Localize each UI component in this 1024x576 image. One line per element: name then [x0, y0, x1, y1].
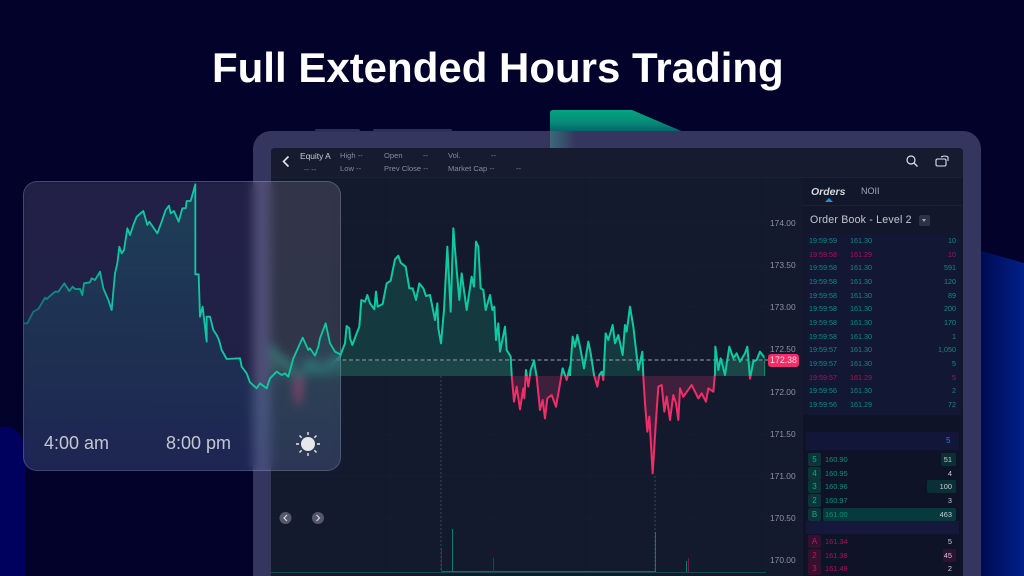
- time and sales rows: 19:59:58: [809, 263, 837, 272]
- ask rows: 5: [948, 537, 952, 546]
- chart grid: [271, 178, 766, 572]
- header quote fields: Prev Close --: [384, 164, 428, 173]
- axis labels: 171.00: [770, 471, 796, 481]
- icon: search: [906, 155, 918, 167]
- time and sales rows: 19:59:59: [809, 236, 837, 245]
- time and sales rows: 161.29: [850, 250, 872, 258]
- time and sales rows: 161.30: [850, 290, 872, 300]
- axis labels: 172.50: [770, 344, 796, 354]
- glass panel: [23, 181, 341, 471]
- time and sales rows: 89: [948, 290, 956, 300]
- header quote fields: --: [516, 164, 521, 173]
- ask rows: 3: [812, 564, 817, 573]
- axis labels: 173.50: [770, 260, 796, 270]
- header strip: [271, 148, 963, 178]
- header quote fields: Market Cap --: [448, 164, 494, 173]
- time and sales rows: 10: [948, 250, 956, 258]
- ask rows: [808, 535, 956, 575]
- device bezel: [253, 131, 981, 576]
- book summary band: 5: [946, 436, 950, 445]
- axis labels: 170.00: [770, 555, 796, 565]
- panel: orders tabs: NOII: [861, 186, 880, 196]
- panel: time and sales list: [806, 234, 959, 415]
- time and sales rows: 72: [948, 400, 956, 409]
- ask rows: 2: [948, 564, 952, 573]
- header quote fields: Vol.: [448, 151, 461, 160]
- time and sales rows: 161.30: [850, 332, 872, 340]
- axis labels: 174.00: [770, 218, 796, 228]
- end time label: 8:00 pm: [166, 433, 231, 453]
- time and sales rows: 161.30: [850, 359, 872, 368]
- time and sales rows: 591: [944, 263, 956, 272]
- last price dashed line: [271, 359, 768, 361]
- axis labels: [770, 218, 796, 565]
- chart area fill: [23, 184, 342, 471]
- time and sales rows: 19:59:58: [809, 304, 837, 313]
- icon: rotate screen: [935, 156, 949, 166]
- ask rows: 2: [812, 550, 817, 560]
- panel: orders tabs: Orders: [811, 186, 845, 198]
- last price tag: 172.38: [770, 355, 797, 365]
- device top button: [373, 129, 452, 132]
- time and sales rows: 1,050: [938, 345, 956, 354]
- bid rows: 4: [948, 469, 952, 478]
- volume bars: [271, 529, 766, 572]
- time and sales rows: 19:59:57: [809, 372, 837, 382]
- time and sales rows: 5: [952, 359, 956, 368]
- bid rows: 2: [812, 496, 817, 505]
- order book heading: Order Book - Level 2: [810, 214, 912, 226]
- time and sales rows: 161.30: [850, 304, 872, 313]
- axis labels: 173.00: [770, 302, 796, 312]
- panel: orders tabs: [803, 178, 963, 206]
- axis labels: 171.50: [770, 429, 796, 439]
- icon: sun: [296, 432, 320, 456]
- time and sales rows: 10: [948, 236, 956, 245]
- time and sales rows: 19:59:58: [809, 332, 837, 340]
- time and sales rows: 161.30: [850, 318, 872, 327]
- time and sales rows: 120: [944, 277, 956, 286]
- time and sales rows: 5: [952, 372, 956, 382]
- bid rows: 4: [812, 469, 817, 478]
- screen: [271, 148, 963, 576]
- bid rows: 160.90: [825, 455, 848, 464]
- bid rows: 5: [812, 455, 817, 464]
- time and sales rows: 19:59:58: [809, 250, 837, 258]
- bid rows: 161.00: [825, 510, 848, 519]
- crosshair lines: [441, 376, 655, 572]
- header quote fields: --: [423, 151, 428, 160]
- time and sales rows: 161.30: [850, 263, 872, 272]
- time and sales rows: 19:59:58: [809, 290, 837, 300]
- time and sales rows: 19:59:56: [809, 400, 837, 409]
- header quote fields: High --: [340, 151, 363, 160]
- time and sales rows: 19:59:58: [809, 318, 837, 327]
- header quote fields: --: [491, 151, 496, 160]
- bid rows: 160.97: [825, 496, 848, 505]
- price chart: [266, 227, 768, 573]
- device top buttons: [315, 129, 360, 132]
- panel: level 2 book background: [803, 415, 963, 576]
- bid rows: [808, 453, 956, 521]
- bid rows: B: [812, 510, 817, 519]
- bid rows: 100: [940, 482, 952, 491]
- time and sales rows: 2: [952, 386, 956, 395]
- time and sales rows: 170: [944, 318, 956, 327]
- time and sales rows: 19:59:58: [809, 277, 837, 286]
- chart line: [23, 184, 342, 388]
- side panel background: [803, 178, 963, 576]
- title: Full Extended Hours Trading: [212, 44, 784, 91]
- header quote fields: Equity A: [300, 151, 331, 161]
- time and sales rows: 200: [944, 304, 956, 313]
- ask rows: 161.49: [825, 564, 848, 573]
- bid rows: 160.95: [825, 469, 848, 478]
- time and sales rows: 161.30: [850, 345, 872, 354]
- glass panel chart: [24, 183, 342, 471]
- time and sales rows: 19:59:57: [809, 359, 837, 368]
- header quote fields: Open: [384, 151, 403, 160]
- header quote fields: [300, 151, 521, 174]
- chart navigation arrows: [280, 512, 324, 524]
- time and sales rows: 161.29: [850, 400, 872, 409]
- time and sales rows: [809, 236, 956, 415]
- spread band: [806, 521, 959, 534]
- ask rows: 161.34: [825, 537, 848, 546]
- bid rows: 160.96: [825, 482, 848, 491]
- header quote fields: Low --: [340, 164, 361, 173]
- start time label: 4:00 am: [44, 433, 109, 453]
- time and sales rows: 161.30: [850, 236, 872, 245]
- time and sales rows: 19:59:57: [809, 345, 837, 354]
- price line: [271, 228, 765, 473]
- bid rows: 463: [940, 510, 952, 519]
- bid rows: 3: [948, 496, 952, 505]
- lighter band under last price: [341, 361, 765, 376]
- time and sales rows: 161.29: [850, 372, 872, 382]
- bid rows: 51: [944, 455, 952, 464]
- axis labels: 172.00: [770, 387, 796, 397]
- time and sales rows: 1: [952, 332, 956, 340]
- ask rows: 161.38: [825, 550, 848, 560]
- book summary band: [806, 432, 959, 450]
- green tab glow through bezel: [550, 131, 576, 148]
- header quote fields: -- --: [304, 165, 316, 174]
- last price tag: [768, 354, 799, 367]
- time and sales rows: 161.30: [850, 386, 872, 395]
- ask rows: A: [812, 537, 817, 546]
- time and sales rows: 19:59:56: [809, 386, 837, 395]
- time and sales rows: 161.30: [850, 277, 872, 286]
- axis labels: 170.50: [770, 513, 796, 523]
- area fills: [270, 246, 764, 456]
- icon: back chevron: [282, 156, 289, 168]
- ask rows: 45: [944, 550, 952, 560]
- bid rows: 3: [812, 482, 817, 491]
